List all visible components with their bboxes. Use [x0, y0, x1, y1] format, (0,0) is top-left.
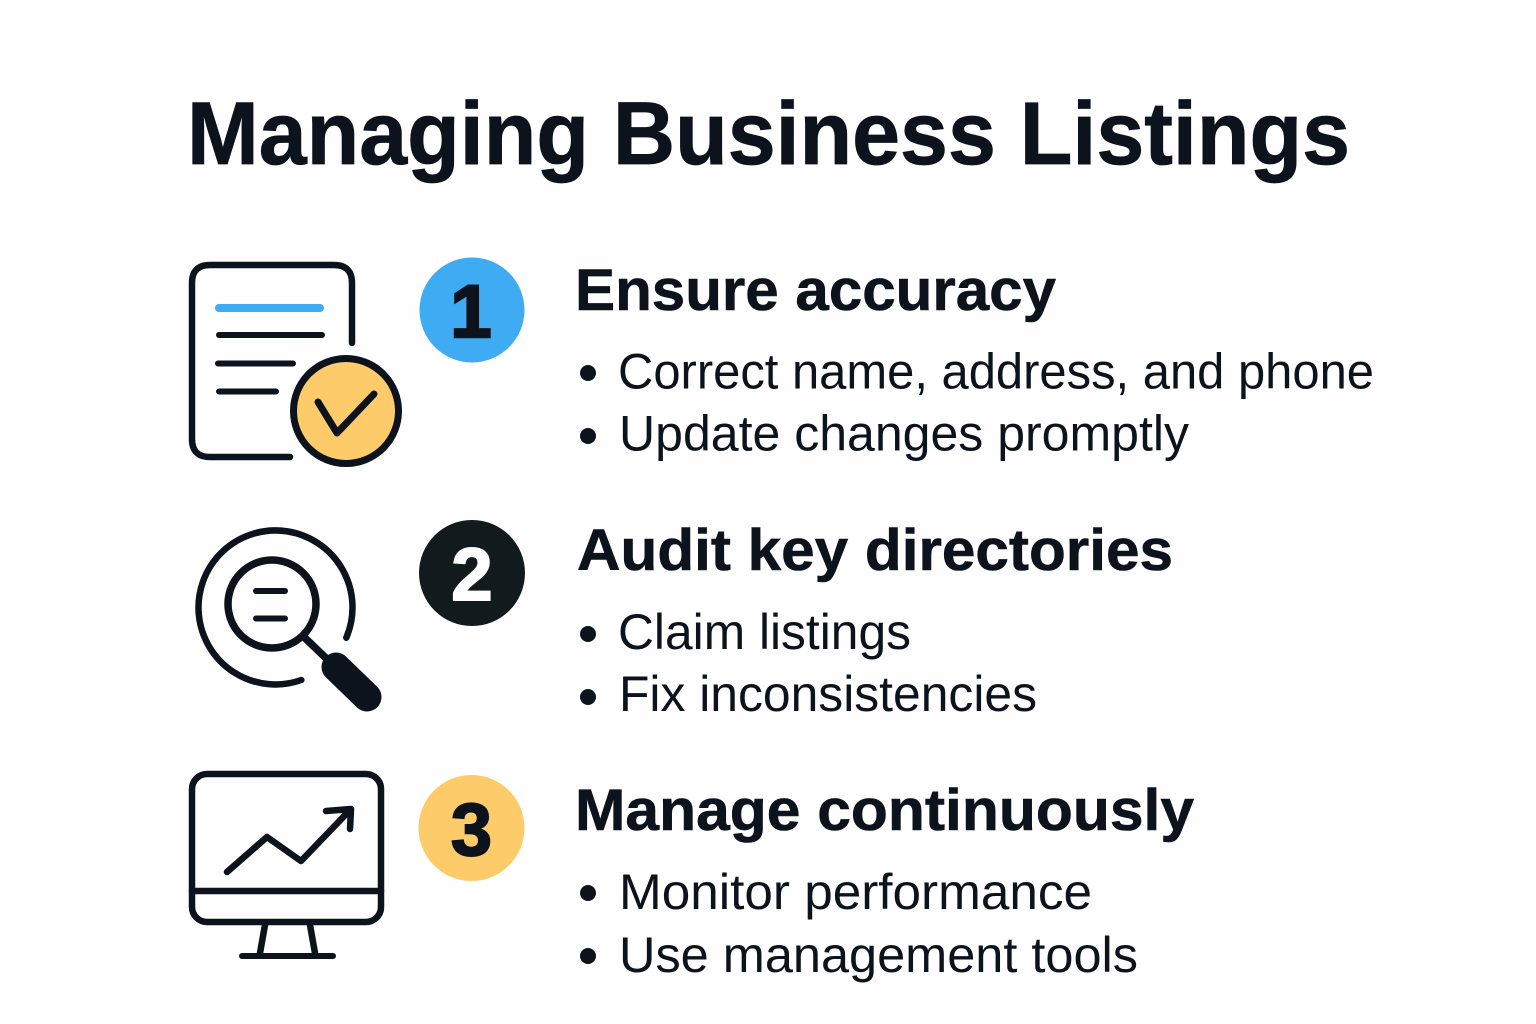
icon: magnifying glass: [198, 530, 367, 697]
bullet list: step 1: [580, 344, 1374, 462]
heading: ensure accuracy: Ensure accuracy: [575, 258, 1056, 323]
number badge 1: 1: [450, 270, 492, 353]
icon: document with check: [192, 265, 398, 464]
bullet list: step 2: Fix inconsistencies: [619, 666, 1037, 722]
bullet list: step 3: Use management tools: [619, 927, 1138, 983]
title: Managing Business Listings: [187, 83, 1350, 183]
number badge 3: [418, 775, 524, 881]
panel: step 3: [192, 774, 1194, 983]
number badge 1: [420, 258, 524, 362]
icon: monitor with chart: [192, 774, 381, 956]
bullet list: step 1: Update changes promptly: [619, 406, 1189, 462]
panel: step 2: [198, 518, 1173, 722]
bullet list: step 2: [580, 604, 1037, 722]
heading: audit key directories: Audit key directories: [577, 518, 1173, 583]
heading: manage continuously: Manage continuously: [575, 778, 1194, 843]
panel: step 1: [192, 258, 1374, 464]
bullet list: step 2: Claim listings: [618, 604, 911, 660]
bullet list: step 3: Monitor performance: [619, 864, 1092, 920]
bullet list: step 1: Correct name, address, and phone: [618, 344, 1374, 400]
bullet list: step 3: [580, 864, 1138, 983]
number badge 3: 3: [451, 788, 492, 871]
number badge 2: 2: [451, 533, 493, 616]
number badge 2: [419, 520, 525, 626]
